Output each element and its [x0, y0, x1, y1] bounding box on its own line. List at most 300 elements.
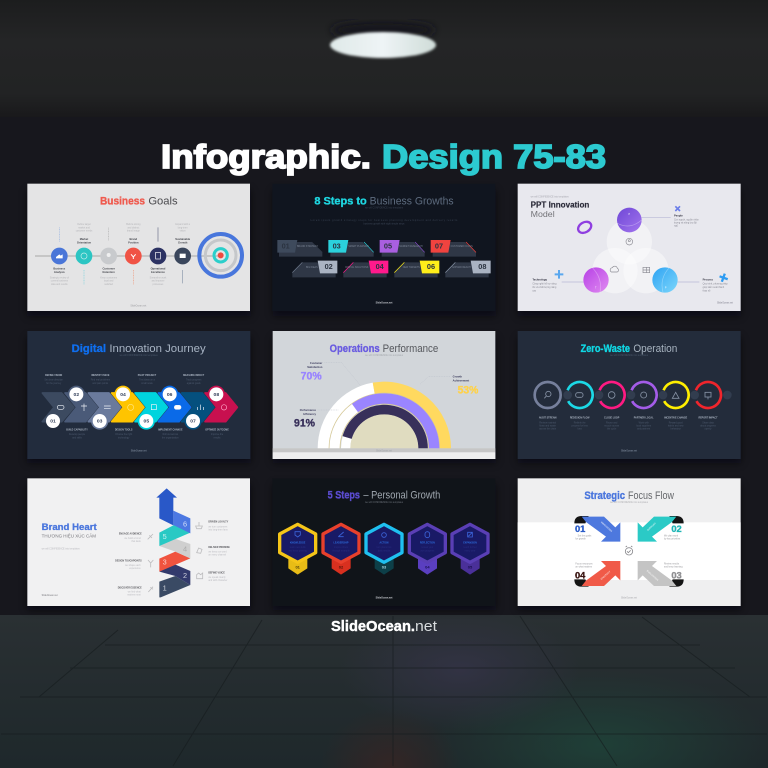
panel: operations performance [273, 331, 495, 459]
step notes [539, 421, 717, 430]
bottom row cards [292, 261, 491, 277]
side notes: we find what [128, 591, 141, 594]
step notes: against goals [187, 382, 201, 385]
numbered badges: 08 [214, 392, 219, 398]
top row cards [277, 240, 476, 257]
stat: customer satisfaction: 70% [301, 370, 322, 382]
side labels: DESIGN TOUCHPOINTS [115, 560, 142, 562]
side notes [124, 525, 228, 597]
step labels: DEFINE VISION [45, 375, 63, 377]
top row cards: CUSTOMER FOCUS [451, 246, 473, 248]
panel: personal growth [272, 478, 495, 606]
numbered badges [46, 386, 225, 430]
leader lines [318, 363, 450, 410]
heading: strategic focus flow: Focus Flow [628, 490, 675, 502]
step notes: Rethink the [574, 421, 586, 424]
milestone notes: Streamline work [150, 276, 167, 279]
bottom row cards: BIG IDEAS [306, 266, 318, 269]
ring icons [544, 391, 711, 399]
intro text: we will CONFIDENCE into templates [365, 207, 404, 210]
milestone labels: Business [53, 266, 66, 270]
step notes: the cycle [607, 427, 617, 430]
stat: growth achievement: Achievement [453, 378, 469, 382]
background: wall [0, 0, 768, 117]
orb: technology [583, 267, 609, 293]
heading: ppt innovation: PPT Innovation [531, 201, 589, 210]
top row cards: MARKET RESEARCH [399, 245, 423, 248]
label: people: Con người, nguồn nhân [674, 219, 699, 222]
label: process: thạo số [703, 289, 711, 292]
step notes: Test ideas on a [139, 379, 156, 382]
step labels: PARTNER LOCAL [634, 417, 654, 420]
label: people: ngũ [674, 225, 679, 228]
side labels: DELIVER PROMISE [208, 547, 230, 549]
step notes: and skills [72, 437, 83, 439]
venn circles [592, 219, 669, 293]
step labels: AUDIT STREAM [539, 417, 557, 420]
milestone notes: satisfied [104, 283, 114, 286]
side labels: DEFINE VOICE [208, 572, 225, 574]
side notes: and with character [208, 579, 228, 582]
footer mark: SlideOcean.net [376, 597, 393, 600]
side labels [115, 521, 230, 590]
hexagon step 5: EXPANSION [463, 541, 477, 544]
zigzag arrow: 3 [163, 558, 167, 567]
background: display room [0, 117, 768, 615]
stat: performance efficiency [294, 408, 317, 430]
footer mark: SlideOcean.net [376, 302, 393, 305]
milestone notes: Strategic review of [50, 276, 69, 279]
milestone notes: long-term [178, 226, 188, 229]
arrow 4 [582, 561, 620, 586]
heading: zero-waste operation: Operation [633, 343, 677, 355]
step notes: the organization [162, 436, 179, 439]
step notes: We plan work [664, 534, 679, 537]
stat: growth achievement [453, 374, 479, 396]
panel: strategic focus flow [518, 478, 741, 606]
milestone notes: market and [78, 226, 91, 229]
heading: business goals [100, 196, 178, 208]
hexagon step 5: 05 [468, 565, 473, 570]
step notes: behaviour [671, 427, 681, 430]
step labels [45, 374, 229, 431]
footer mark: SlideOcean.net [621, 597, 637, 600]
hexagon step 1 [280, 524, 316, 575]
arrow labels: STRATEGY [600, 570, 612, 581]
footer mark: SlideOcean.net [130, 305, 147, 308]
numbered badges: 02 [74, 392, 79, 398]
label: people: People [674, 214, 683, 218]
floor band: SlideOcean.net [376, 450, 392, 453]
step labels: OPTIMIZE OUTCOME [205, 429, 229, 431]
step notes: Set clear direction [44, 379, 64, 382]
side notes: on every channel [208, 554, 227, 557]
milestone circles [51, 248, 191, 264]
step labels: REPORT IMPACT [698, 417, 718, 420]
numbered badges: 03 [97, 419, 103, 425]
heading: digital innovation journey: we will CONFIDENCE into templates [120, 354, 159, 357]
zigzag arrow: 4 [183, 545, 187, 554]
intro text: Lorem ipsum growth strategy steps for business planning development and delivery results [311, 219, 458, 222]
hexagon step 4: own progress [420, 549, 435, 552]
ring steps [535, 378, 725, 412]
stat: growth achievement: 53% [458, 384, 479, 396]
arrow labels: INNOVATION [600, 521, 613, 533]
stat: performance efficiency: Performance [300, 408, 317, 412]
step notes: and keep learning [664, 566, 683, 569]
step notes: Develop people [69, 434, 86, 436]
chevron icons [57, 404, 227, 411]
step notes: recycle across [604, 424, 620, 427]
milestone labels: Orientation [77, 241, 91, 245]
hexagon step 4: REFLECTION [420, 542, 435, 544]
milestone notes: vision [180, 231, 186, 233]
title: Design 75-83 [382, 138, 606, 175]
footer brand: SlideOcean. [331, 618, 415, 635]
step notes: and partners [637, 427, 651, 430]
orb: technology: T [595, 288, 597, 290]
purple ring [576, 220, 593, 235]
side notes: we build a bond [124, 538, 141, 540]
heading: brand heart [42, 522, 97, 551]
stat: customer satisfaction [301, 361, 323, 382]
hexagon step 4: review your [421, 546, 434, 549]
heading: 8 steps [314, 195, 454, 207]
footer mark: SlideOcean.net [131, 450, 147, 453]
step notes: Improve the [211, 433, 224, 436]
heading: ppt innovation: we will CONFIDENCE into templates [531, 195, 570, 198]
orb: process: P [665, 288, 667, 290]
milestone notes: Build a strong [126, 223, 141, 226]
heading: zero-waste operation: Zero-Waste [581, 343, 630, 355]
heading: operations performance: Performance [383, 343, 438, 355]
hexagon step 3: turn plans into [377, 546, 392, 549]
milestone notes: Define target [77, 223, 91, 226]
step labels: BUILD CAPABILITY [66, 428, 88, 431]
hexagon step 1: and keep growing [288, 549, 308, 552]
orb: people [617, 208, 642, 232]
heading: brand heart: Brand Heart [42, 522, 97, 532]
footer mark: SlideOcean.net [621, 450, 637, 453]
panel: 8 steps [272, 184, 495, 311]
step notes: Review results [664, 562, 680, 565]
step notes: on what matters [575, 566, 593, 569]
step numbers: 01 [575, 524, 585, 534]
label: process: Quy trình, phương pháp [703, 283, 728, 286]
hexagon step 2: inspire others [334, 546, 349, 549]
side notes: we shape each [125, 565, 141, 567]
heading: digital innovation journey [72, 343, 206, 357]
side icons [148, 522, 203, 592]
heading: 5 steps: 5 Steps [328, 490, 360, 502]
milestone notes: processes [153, 283, 164, 286]
step notes: openly [705, 428, 712, 430]
hexagon step 1: learn new skills [290, 546, 306, 549]
step notes: local suppliers [636, 424, 652, 427]
heading: 5 steps: we will CONFIDENCE into templates [365, 501, 404, 504]
footer mark: SlideOcean.net [717, 301, 733, 304]
step numbers: 02 [671, 524, 682, 534]
top row cards: 05 [384, 242, 392, 251]
hexagon step 5 [452, 524, 488, 575]
arrow 2 [638, 517, 676, 542]
step labels: PILOT PROJECT [138, 375, 157, 377]
step notes: Share data [702, 421, 714, 424]
milestone labels: Position [128, 241, 139, 245]
chevron sequence [42, 393, 237, 422]
hexagon step 3: 03 [382, 565, 387, 570]
step notes: Set the goals [578, 534, 592, 537]
title [161, 138, 606, 175]
step notes: Reward good [669, 421, 683, 424]
step numbers: 03 [671, 570, 682, 580]
milestone labels: Brand [129, 237, 138, 241]
step notes: results [214, 436, 221, 439]
milestone labels: Excellence [151, 270, 165, 274]
milestone labels: Sustainable [175, 237, 191, 241]
side labels: DRIVEN LOYALTY [208, 521, 229, 524]
top row cards: 03 [333, 242, 341, 251]
heading: 5 steps [328, 490, 440, 504]
milestone labels: Operational [151, 266, 166, 270]
bottom row cards: 02 [325, 262, 333, 271]
milestone notes: data and results [51, 283, 68, 286]
dashed connectors [59, 227, 183, 284]
milestone labels: Growth [178, 241, 188, 245]
white band [518, 522, 741, 580]
arrow nodes [563, 391, 732, 399]
milestone labels: Analysis [54, 270, 65, 274]
panel: business goals [27, 184, 250, 311]
side notes: experience [129, 567, 141, 570]
stat: customer satisfaction: Customer [310, 361, 322, 365]
milestone notes: loyal and [104, 281, 114, 283]
hexagon step 4 [409, 524, 445, 575]
heading: 8 steps: Business Growths [370, 195, 454, 207]
step notes [44, 379, 224, 439]
connector lines [562, 217, 699, 282]
step labels: IMPLEMENT CHANGE [158, 428, 183, 431]
numbered badges: 07 [190, 419, 196, 425]
step notes: small scale [141, 383, 153, 385]
top row cards: 01 [282, 242, 290, 251]
side notes: we turn customers [208, 525, 228, 528]
side notes: into long-term fans [208, 528, 228, 531]
step notes: Roll out across [163, 433, 179, 436]
hexagon step 1: KNOWLEDGE [290, 542, 306, 544]
zigzag arrow [156, 488, 190, 597]
step notes: Review material [539, 421, 556, 424]
clock icon [625, 546, 633, 555]
bottom row cards: EXPAND REACH [452, 266, 471, 269]
step notes: about progress [700, 424, 717, 427]
arrow labels [600, 521, 659, 582]
semi-donut chart [323, 387, 445, 448]
side notes: that lasts [131, 540, 141, 543]
arrow labels: SUPPORT [647, 522, 657, 532]
stat: performance efficiency: 91% [294, 418, 316, 430]
timeline line [35, 254, 220, 257]
milestone labels: Market [80, 237, 88, 241]
step notes: Focus resources [575, 562, 593, 565]
step labels: MEASURE IMPACT [183, 374, 205, 377]
heading: ppt innovation [531, 195, 589, 219]
numbered badges: 05 [144, 419, 149, 425]
heading: zero-waste operation [581, 343, 677, 357]
step notes: Track progress [186, 379, 202, 382]
step notes: loss [578, 428, 583, 430]
zigzag arrow: 1 [163, 584, 167, 593]
panel: zero-waste operation [518, 331, 741, 459]
title: Infographic. [161, 138, 371, 175]
stat: customer satisfaction: Satisfaction [307, 365, 323, 369]
step notes [575, 534, 683, 569]
step notes: habits and new [668, 424, 684, 427]
hexagon step 2: LEADERSHIP [333, 541, 349, 544]
step notes: by key priorities [664, 538, 681, 541]
step labels: INCENTIVE CHANGE [664, 417, 688, 420]
label: technology: Công nghệ hỗ trợ nâng [532, 283, 557, 286]
milestone notes: and improve [152, 280, 165, 283]
floor band [273, 448, 495, 459]
step notes: and pain points [92, 382, 109, 385]
step notes: Choose the right [115, 433, 133, 436]
corner caps [574, 516, 684, 587]
milestone labels: Retention [103, 270, 115, 274]
heading: strategic focus flow: Strategic [584, 490, 625, 502]
step numbers: 04 [575, 570, 586, 580]
numbered badges: 06 [167, 392, 173, 398]
heading: operations performance: we will CONFIDENCE into templates [365, 354, 404, 357]
label: technology: tốc và chất lượng nâng [532, 286, 557, 289]
panel: digital innovation journey [27, 331, 250, 459]
label: process: giúp kiểm soát thành [703, 286, 725, 289]
step labels: IDENTIFY ISSUE [91, 375, 110, 377]
intro text: business growth with eight simple steps [364, 223, 405, 226]
hexagon step 3: daily results [378, 549, 391, 552]
step notes: technology [118, 436, 130, 439]
step labels [539, 417, 718, 420]
heading: ppt innovation: Model [531, 210, 555, 219]
heading: brand heart: THƯƠNG HIỆU XÚC CẢM [42, 531, 96, 539]
stat: performance efficiency: Efficiency [303, 412, 317, 416]
step notes: Work with [639, 421, 649, 424]
zigzag arrow: 2 [183, 571, 187, 580]
slide shadows [27, 190, 741, 610]
label: people [674, 206, 699, 228]
bottom row cards: NEW TARGETS [403, 266, 420, 269]
heading: strategic focus flow: we will CONFIDENCE into templates [610, 501, 649, 504]
step notes: process for less [572, 424, 589, 427]
orb: process [652, 267, 678, 293]
side labels: ENGAGE AUDIENCE [119, 532, 142, 535]
bottom row cards: DIGITAL SOLUTIONS [345, 266, 369, 269]
heading: strategic focus flow [584, 490, 675, 504]
hexagon step 4: 04 [425, 565, 430, 570]
milestone notes: Expand with a [175, 223, 191, 226]
step labels: CLOSE LOOP [604, 418, 620, 420]
heading: business goals: Goals [148, 196, 178, 208]
heading: digital innovation journey: Innovation Journey [109, 343, 206, 355]
arrow 1 [582, 517, 620, 542]
hexagon step 3 [366, 524, 402, 575]
hexagon step 5: reach further [463, 546, 477, 549]
step notes: across the chain [539, 427, 557, 430]
milestone notes: and distinct [127, 226, 140, 229]
milestone notes: brand image [127, 230, 141, 233]
orb: people: P [629, 214, 631, 216]
heading: 5 steps: – Personal Growth [363, 490, 440, 502]
intro text [311, 207, 458, 226]
bottom row cards: 08 [478, 262, 486, 271]
step numbers [575, 524, 682, 580]
step notes: for growth [575, 538, 586, 541]
step notes: for the journey [46, 382, 62, 385]
step labels: DESIGN TOOLS [115, 429, 133, 431]
label: process: Process [703, 278, 714, 282]
label: people: lượng và năng lực đội [674, 222, 697, 225]
arrow 3 [638, 561, 676, 586]
side notes: we speak clearly [208, 576, 226, 579]
heading: business goals: Business [100, 196, 145, 208]
zigzag arrow: 6 [183, 520, 187, 529]
footer mark: SlideOcean.net [42, 594, 58, 597]
heading: digital innovation journey: Digital [72, 343, 106, 355]
step notes: flows and waste [539, 424, 557, 427]
heading: brand heart: we will CONFIDENCE into templates [42, 548, 81, 551]
side notes: we keep our word [208, 551, 227, 554]
bottom row cards: 04 [376, 262, 385, 271]
arrow labels: EVALUATION [646, 570, 659, 582]
top row cards: 07 [435, 242, 443, 251]
heading: 8 steps: 8 Steps to [314, 195, 367, 207]
step notes: Find real problems [91, 379, 111, 382]
milestone labels [53, 237, 191, 274]
zigzag arrow: 5 [163, 532, 167, 541]
panel: brand heart [27, 478, 250, 606]
hexagon step 2: 02 [339, 565, 344, 570]
hexagon step 5: every year [465, 549, 476, 552]
ceiling lamp [330, 21, 436, 58]
label: technology [532, 270, 563, 292]
step labels: REDESIGN FLOW [570, 418, 590, 420]
numbered badges: 04 [120, 392, 126, 398]
milestone labels: Customer [102, 266, 115, 270]
step notes: Reuse and [606, 422, 618, 424]
footer brand: net [415, 618, 438, 635]
label: technology: Technology [532, 278, 548, 282]
side notes: matters most [127, 594, 141, 597]
side labels: DISCOVER ESSENCE [118, 588, 142, 590]
hexagon step 3: ACTION [380, 541, 389, 544]
milestone notes: current business [51, 280, 69, 283]
top row cards: BRAND STRATEGY [297, 245, 319, 248]
hexagon step 2: through example [332, 549, 350, 552]
top row cards: SMART PLANNING [348, 245, 369, 248]
heading: zero-waste operation: we will CONFIDENCE into templates [610, 354, 649, 357]
hexagon step 2 [323, 524, 359, 575]
stat: growth achievement: Growth [453, 374, 462, 378]
hexagon step 1: 01 [295, 565, 301, 570]
milestone notes: Keep customers [100, 276, 118, 279]
panel: ppt innovation model [518, 184, 741, 311]
venn icons [610, 238, 650, 273]
heading: operations performance: Operations [330, 343, 380, 355]
milestone notes [50, 223, 191, 286]
label: technology: cao [532, 290, 537, 292]
background: tiled floor [0, 615, 768, 768]
label: process [703, 272, 729, 292]
